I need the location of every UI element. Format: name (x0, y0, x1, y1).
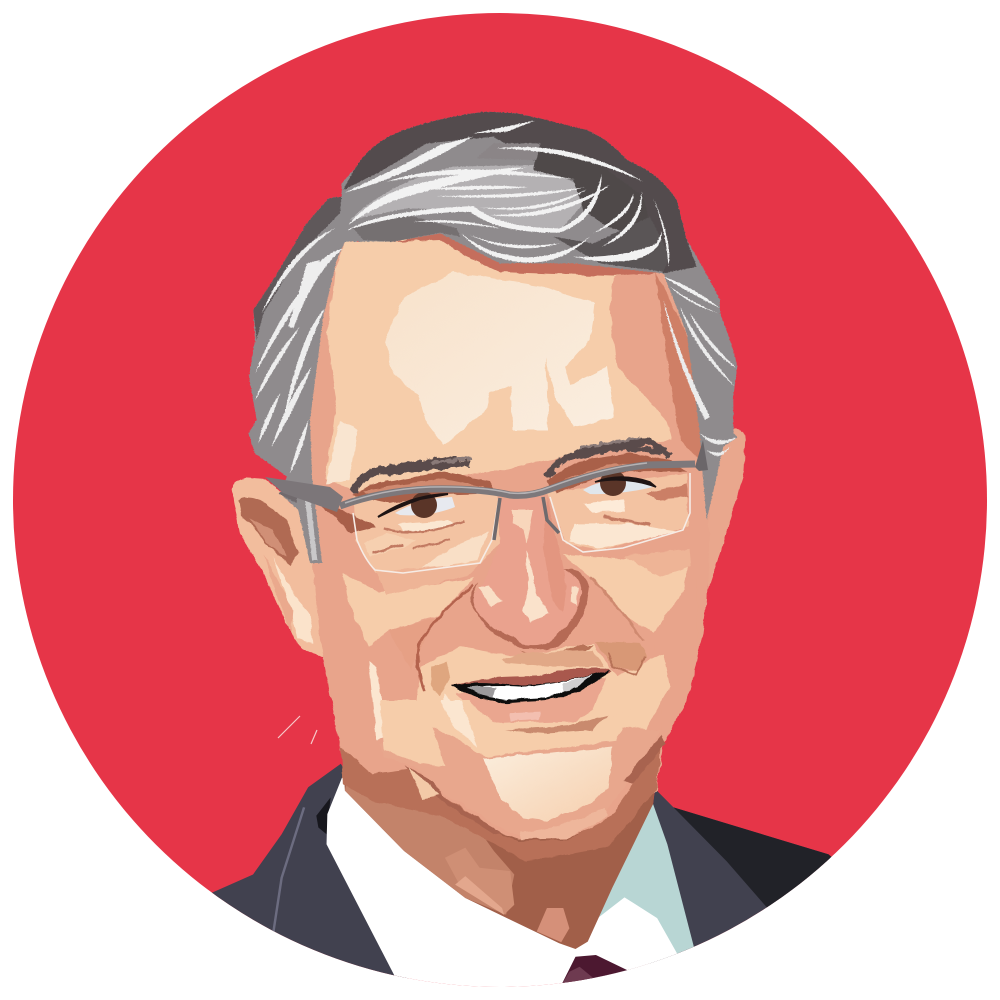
dark left temple (253, 197, 342, 340)
ear: right (704, 429, 746, 590)
right eyebrow (548, 438, 670, 477)
forehead peach (325, 236, 672, 490)
smile lines (417, 585, 473, 690)
right lens highlights (570, 523, 677, 548)
upper lip shade (502, 650, 603, 667)
left sideburn lower shades (290, 480, 322, 563)
right shadow outside eye (647, 483, 688, 500)
left jaw crease (404, 765, 502, 834)
silver strands left side (255, 228, 343, 473)
lower lip (457, 677, 607, 730)
ear lobe highlight (273, 557, 313, 643)
pale blue shirt side (594, 804, 694, 978)
right jaw crease (624, 735, 665, 784)
right brow shadow (547, 453, 687, 493)
neck (344, 785, 654, 949)
left highlight streak (441, 700, 478, 747)
iris (600, 470, 626, 496)
left eye (378, 492, 455, 518)
right cheek peach (563, 555, 690, 633)
mouth under shadow (504, 715, 608, 734)
small scratch marks (278, 716, 317, 744)
neck light tone (445, 848, 514, 915)
lapel highlight line (273, 807, 304, 932)
tie (562, 955, 628, 983)
teeth (467, 675, 593, 700)
bust: suit, shirt and neck (212, 764, 832, 987)
glasses (265, 440, 708, 573)
light sweep base (350, 165, 587, 230)
left cheek peach (343, 573, 473, 647)
face base (308, 240, 712, 839)
jaw mid tone (380, 725, 661, 836)
left brow shadow (352, 472, 497, 503)
left mouth corner shadow (432, 662, 450, 697)
left eye socket (353, 490, 500, 573)
hair base (248, 112, 737, 563)
nose (470, 497, 588, 650)
eye white (395, 497, 455, 515)
right eye (583, 470, 656, 496)
dark right fringe (553, 217, 670, 272)
ear: left (232, 478, 323, 657)
left eyebrow (353, 458, 473, 492)
mid grey band (477, 143, 540, 160)
brow wrinkle pink (317, 500, 377, 533)
head group (232, 232, 746, 861)
cheek peach (380, 700, 633, 767)
hair (248, 112, 737, 563)
jacket lapel shadow (316, 797, 331, 834)
left jacket (212, 764, 408, 978)
hairline shadow (393, 232, 665, 276)
neck highlight (537, 908, 569, 942)
chin lower rim (518, 807, 608, 839)
neck mid tone (344, 786, 514, 914)
head and face (308, 232, 712, 839)
eye white (583, 480, 653, 494)
dark crown (343, 112, 697, 273)
under-eye lines (372, 522, 465, 553)
right eye socket (547, 473, 688, 550)
right shaded temple (655, 272, 712, 470)
white shirt (326, 777, 677, 987)
silver strands right side (663, 300, 737, 456)
nose pads (494, 498, 500, 540)
chin highlight (484, 747, 612, 821)
nose bridge highlight (512, 510, 533, 543)
nose shadow side (543, 497, 567, 613)
iris (411, 492, 437, 518)
right jacket (650, 791, 830, 964)
left lens highlights (398, 521, 457, 532)
jaw shadow band (341, 739, 661, 861)
left cheek highlight strip (368, 660, 387, 740)
lash line (595, 477, 656, 487)
lower face peach (387, 643, 670, 740)
left lens (353, 498, 499, 573)
mouth opening (451, 669, 611, 703)
nose tip highlight (523, 550, 549, 622)
dark grey front wave (353, 216, 460, 242)
nose outline (470, 568, 589, 650)
nostril wing highlights (478, 585, 502, 607)
right cheek fold shadow (595, 642, 647, 672)
temple pale stroke (325, 420, 358, 485)
forehead highlight (385, 272, 614, 445)
right lens (550, 473, 690, 552)
ear inner (238, 497, 298, 565)
facial features (317, 453, 697, 740)
dark mass at right of crown (533, 150, 653, 240)
top bar (340, 464, 695, 506)
left cheek pale strip (377, 563, 478, 595)
lip highlight (510, 712, 540, 722)
mouth (451, 668, 612, 703)
right jacket dark panel (673, 807, 837, 908)
chin and jaw (341, 700, 665, 861)
silver strands top (345, 121, 720, 313)
right hinge (695, 440, 708, 471)
teeth shade (467, 687, 497, 698)
lash line (378, 494, 448, 517)
upper lip (451, 668, 612, 688)
left temple arm (265, 477, 343, 512)
